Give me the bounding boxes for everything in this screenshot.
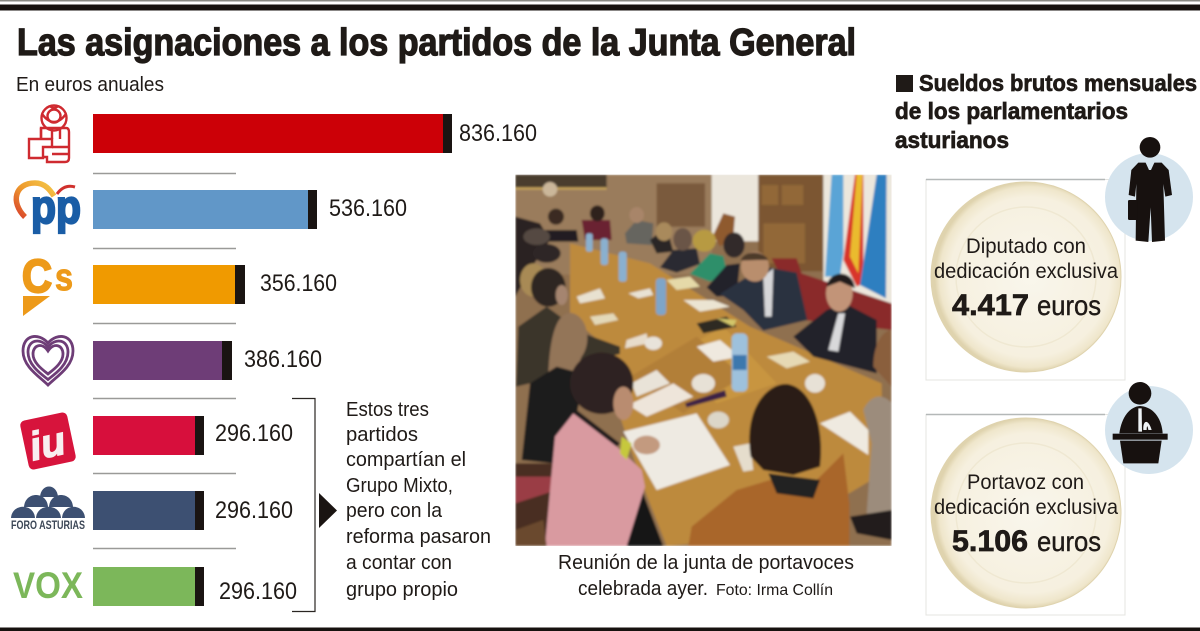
icon: speaker at podium (1105, 382, 1193, 474)
salary text: 5.106 (952, 525, 1028, 558)
heading: monthly salaries (895, 70, 1197, 153)
bar chart: party allocations (93, 114, 537, 606)
icon: Izquierda Unida logo (19, 412, 77, 470)
icon: PP logo (16, 180, 81, 233)
text block: Grupo Mixto note (346, 398, 491, 601)
caption (558, 551, 854, 600)
arrow: bracket pointer (319, 493, 337, 528)
icon: PSOE logo (29, 106, 69, 162)
salary text (934, 470, 1118, 558)
text block: Grupo Mixto note: compartían el (346, 448, 466, 471)
icon: Podemos heart logo (23, 336, 73, 385)
heading: monthly salaries: de los parlamentarios (895, 98, 1128, 124)
bracket: Grupo Mixto (292, 398, 315, 612)
bar: PP: 536.160 (329, 195, 407, 222)
caption: Reunión de la junta de portavoces (558, 551, 854, 574)
bar: Ciudadanos (93, 265, 337, 304)
bar: IU (93, 416, 293, 455)
salary text: dedicación exclusiva (934, 495, 1118, 519)
text block: Grupo Mixto note: partidos (346, 423, 418, 446)
title: Las asignaciones a los partidos de la Junta General (17, 22, 856, 64)
icon: Vox logo: VOX (13, 565, 83, 606)
salary text: euros (1037, 526, 1101, 557)
panel: portavoz salary (926, 414, 1125, 615)
bar: Podemos: 386.160 (244, 346, 322, 373)
salary text (934, 234, 1118, 322)
panel: diputado salary (926, 180, 1125, 380)
icon: Ciudadanos logo: s (55, 257, 73, 299)
icon: Foro Asturias logo (11, 486, 85, 532)
coin (931, 418, 1121, 608)
bar: PSOE (93, 114, 537, 153)
coin (931, 182, 1121, 372)
text block: Grupo Mixto note: grupo propio (346, 578, 458, 601)
icon: Foro Asturias logo: FORO ASTURIAS (11, 520, 85, 532)
caption: celebrada ayer. (578, 577, 708, 600)
bar: Foro Asturias (93, 491, 293, 530)
text block: Grupo Mixto note: pero con la (346, 499, 443, 522)
caption: Foto: Irma Collín (716, 582, 833, 599)
icon: Izquierda Unida logo: iu (25, 419, 69, 469)
salary text: Diputado con (966, 234, 1086, 258)
bar: Podemos (93, 341, 322, 380)
salary text: Portavoz con (967, 470, 1084, 494)
bar: Ciudadanos: 356.160 (260, 270, 337, 297)
salary text: euros (1037, 290, 1101, 321)
subtitle: units: En euros anuales (16, 73, 164, 96)
bar: Vox (93, 567, 297, 606)
icon: businessman (1105, 137, 1193, 242)
icon: Ciudadanos logo: C (22, 250, 52, 302)
bar: PP (93, 190, 407, 229)
heading: monthly salaries: asturianos (895, 127, 1009, 153)
text block: Grupo Mixto note: reforma pasaron (346, 525, 491, 548)
text block: Grupo Mixto note: Estos tres (346, 398, 429, 421)
photo: meeting of the junta de portavoces (515, 175, 892, 546)
salary text: 4.417 (952, 289, 1029, 322)
salary text: dedicación exclusiva (934, 259, 1118, 283)
icon: PP logo: pp (31, 180, 81, 233)
text block: Grupo Mixto note: a contar con (346, 551, 452, 574)
text block: Grupo Mixto note: Grupo Mixto, (346, 474, 453, 497)
bar: Vox: 296.160 (219, 578, 297, 605)
bar: Foro Asturias: 296.160 (215, 497, 293, 524)
bar: PSOE: 836.160 (459, 120, 537, 147)
bar: IU: 296.160 (215, 420, 293, 447)
icon: Ciudadanos logo (22, 250, 73, 316)
